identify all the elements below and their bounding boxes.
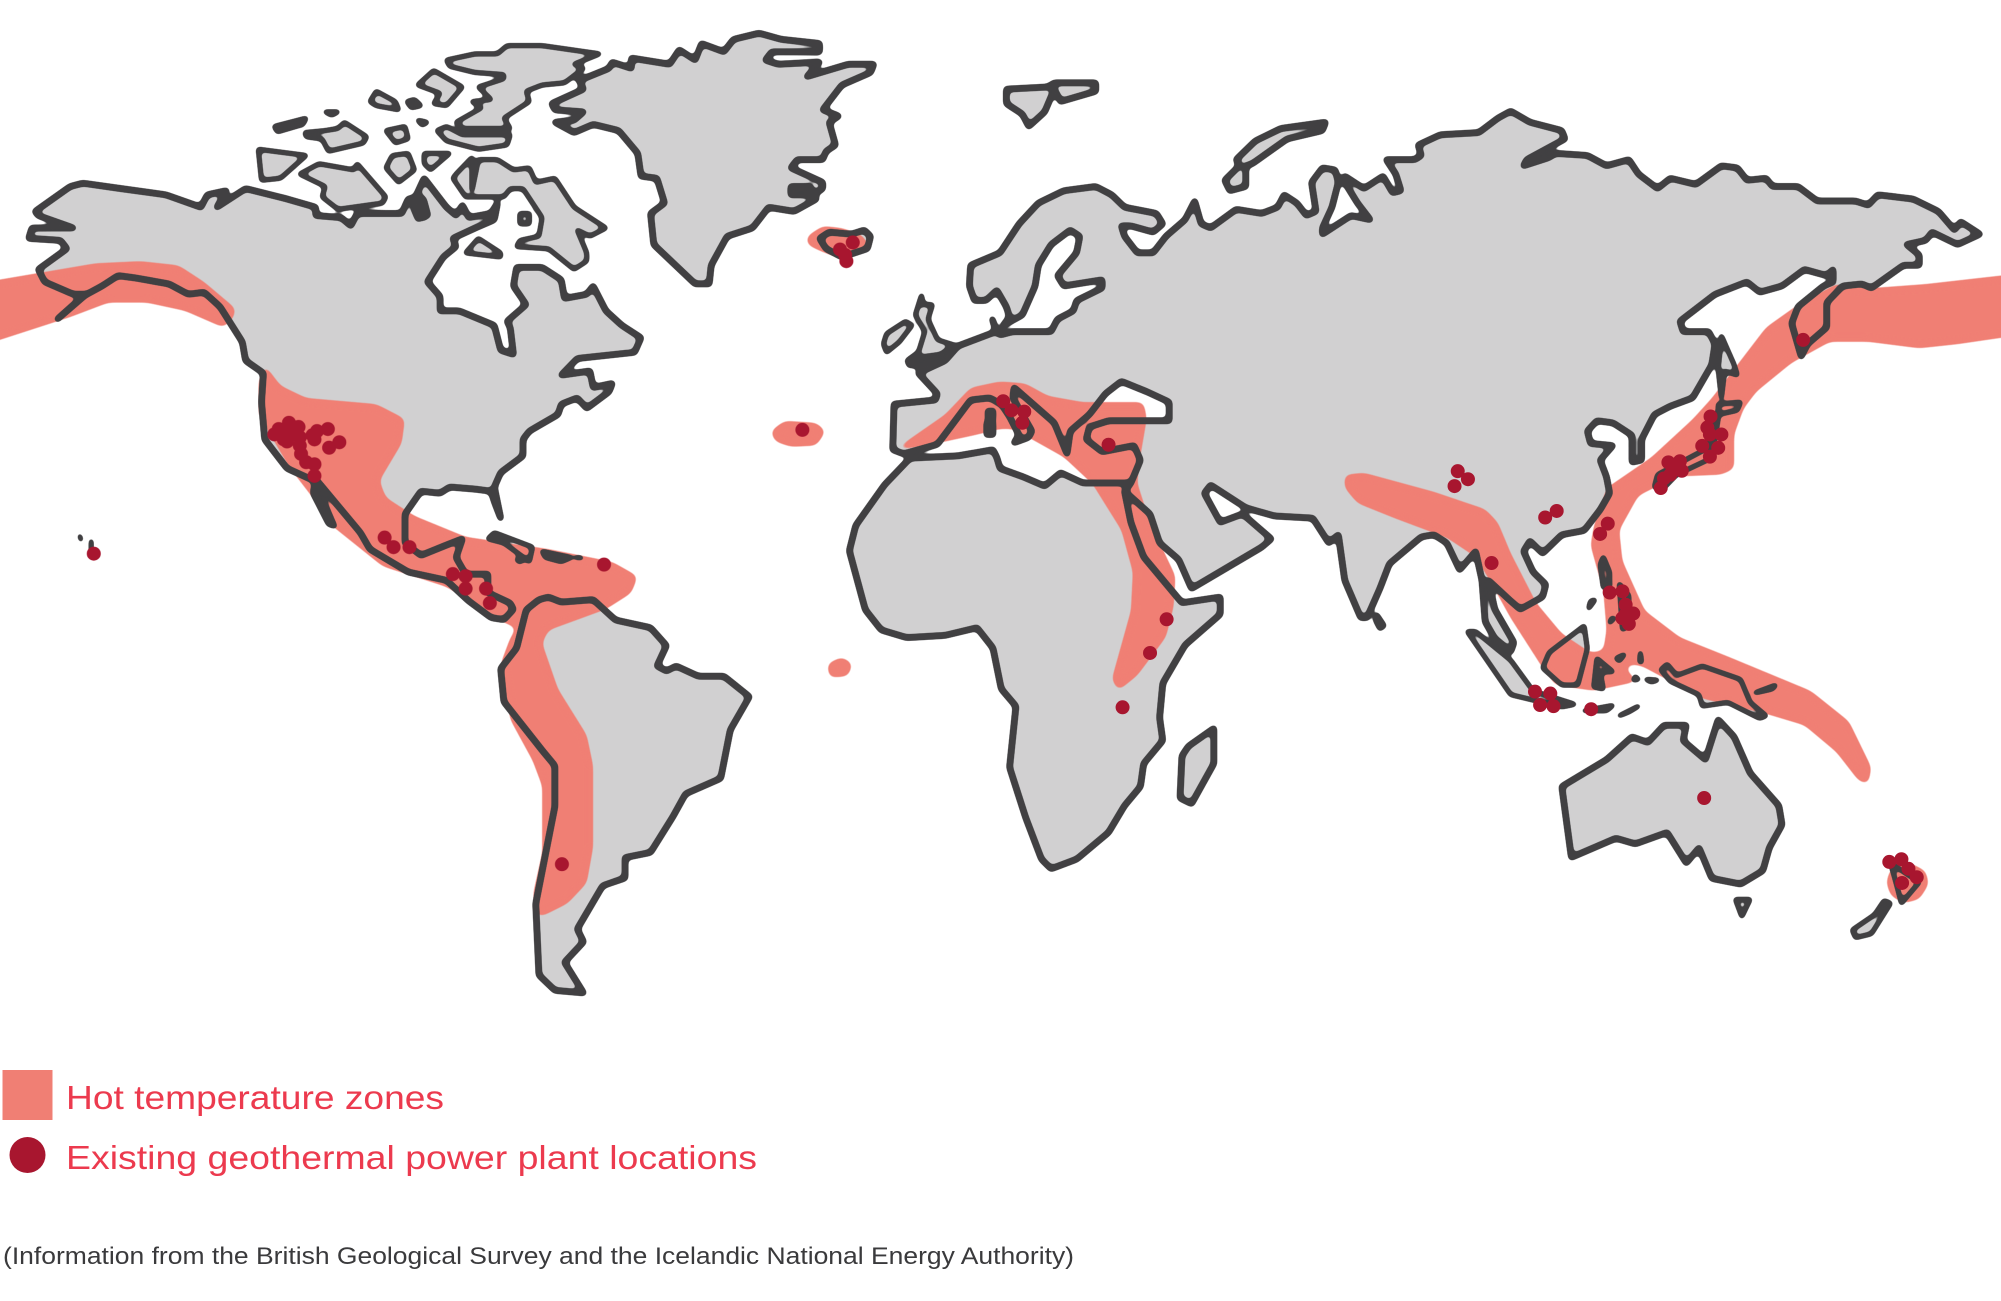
zone: Azores bbox=[770, 421, 826, 447]
legend swatch: hot zones bbox=[2, 1070, 52, 1120]
source note: (Information from the British Geological Survey and the Icelandic National Energy Authority) bbox=[3, 1243, 1074, 1270]
plants: Italy, Turkey and Kamchatka bbox=[1003, 340, 1803, 445]
land masses grey fill bbox=[28, 34, 1979, 994]
zone: New Zealand bbox=[1886, 861, 1929, 903]
legend bbox=[2, 1070, 757, 1176]
legend label: hot zones: Hot temperature zones bbox=[66, 1079, 444, 1116]
plants: Africa, Asia and Oceania bbox=[1123, 416, 1917, 883]
legend label: power plants: Existing geothermal power plant locations bbox=[66, 1139, 757, 1176]
geothermal power plant locations bbox=[94, 242, 1917, 883]
hot temperature zones bbox=[0, 226, 2001, 916]
zone: Iceland bbox=[807, 226, 871, 257]
zone: Himalaya, Southeast Asia and Pacific rim bbox=[1345, 272, 2001, 785]
coastline outlines bbox=[29, 33, 1980, 993]
plants: Hawaii and Chile bbox=[94, 554, 562, 864]
zone: western Americas bbox=[258, 365, 638, 916]
legend swatch: power plants bbox=[10, 1137, 46, 1173]
zone: Alaska and Aleutians bbox=[0, 261, 236, 348]
zone: Mediterranean and East Africa bbox=[897, 381, 1176, 691]
zone: mid Atlantic bbox=[827, 657, 853, 678]
plants: Americas and Atlantic north bbox=[274, 242, 853, 603]
